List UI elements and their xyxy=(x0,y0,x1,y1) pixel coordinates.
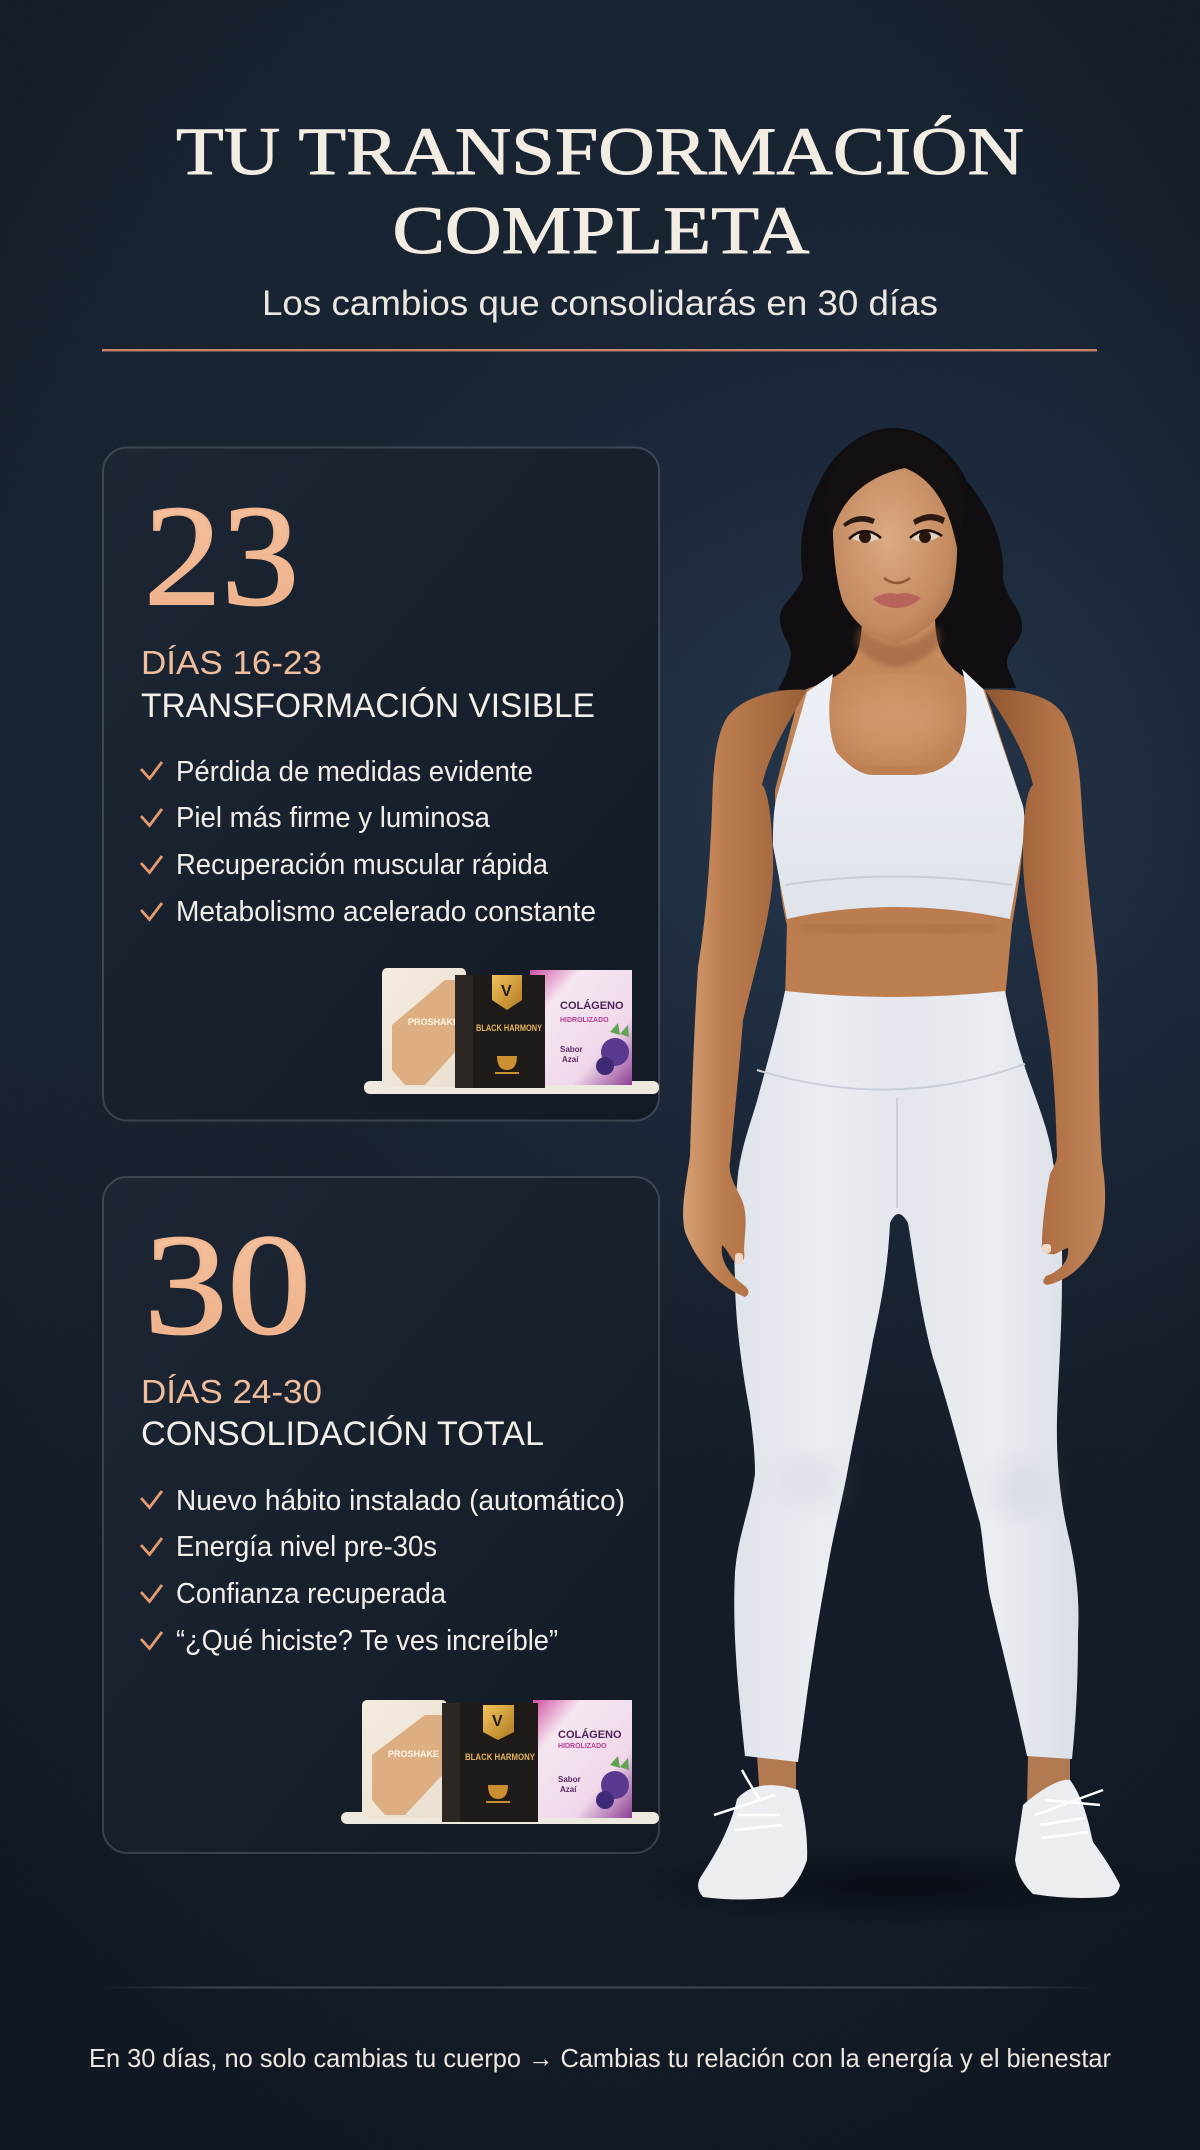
left arm and hand xyxy=(683,690,807,1297)
products shelf: Azaí xyxy=(560,1785,577,1794)
products shelf: Sabor xyxy=(560,1045,583,1054)
big number 23: 23 xyxy=(144,477,299,636)
products shelf: HIDROLIZADO xyxy=(558,1743,607,1750)
subtitle: Los cambios que consolidarás en 30 días xyxy=(262,284,938,323)
hair back xyxy=(778,428,1022,690)
products shelf: V xyxy=(501,983,512,1000)
footer divider xyxy=(102,1986,1097,1988)
title: TU TRANSFORMACIÓN xyxy=(176,113,1024,189)
checklist: Confianza recuperada xyxy=(176,1578,447,1610)
right shoe xyxy=(1015,1780,1120,1898)
neck shadow xyxy=(855,625,942,667)
phase heading: CONSOLIDACIÓN TOTAL xyxy=(141,1415,544,1453)
hair top xyxy=(824,430,967,548)
products shelf: Azaí xyxy=(562,1055,579,1064)
products shelf: PROSHAKE xyxy=(388,1749,439,1759)
chest highlight xyxy=(837,682,953,758)
panel: días 16-23 xyxy=(103,448,659,1120)
products shelf xyxy=(364,968,659,1094)
checklist: Pérdida de medidas evidente xyxy=(176,756,533,788)
checklist: Energía nivel pre-30s xyxy=(176,1531,437,1563)
products shelf: V xyxy=(492,1713,503,1730)
ankles xyxy=(757,1755,1070,1805)
leggings waistband and seam xyxy=(757,1064,1025,1208)
midriff shading xyxy=(800,925,995,1000)
products shelf: BLACK HARMONY xyxy=(476,1023,542,1033)
checklist: “¿Qué hiciste? Te ves increíble” xyxy=(176,1625,558,1657)
checklist xyxy=(141,756,596,928)
face xyxy=(833,463,957,643)
lips xyxy=(873,593,921,608)
checklist: Metabolismo acelerado constante xyxy=(176,896,596,928)
nails xyxy=(735,1244,1051,1264)
knee shading xyxy=(780,1456,1048,1518)
title: COMPLETA xyxy=(392,192,810,268)
big number 30: 30 xyxy=(144,1206,311,1365)
title xyxy=(176,113,1024,268)
eyebrows xyxy=(843,514,945,527)
leggings xyxy=(734,991,1079,1762)
torso xyxy=(775,615,1023,1000)
products shelf: Sabor xyxy=(558,1775,581,1784)
products shelf xyxy=(341,1700,659,1824)
checklist: Nuevo hábito instalado (automático) xyxy=(176,1485,625,1517)
products shelf: COLÁGENO xyxy=(560,999,624,1012)
checklist: Piel más firme y luminosa xyxy=(176,802,491,834)
checklist: Recuperación muscular rápida xyxy=(176,849,549,881)
phase heading: TRANSFORMACIÓN VISIBLE xyxy=(141,687,595,725)
left shoe xyxy=(698,1785,807,1900)
bra xyxy=(773,669,1024,919)
products shelf: COLÁGENO xyxy=(558,1728,622,1741)
products shelf: PROSHAKE xyxy=(408,1017,459,1027)
period label: DÍAS 16-23 xyxy=(141,644,322,681)
products shelf: BLACK HARMONY xyxy=(465,1752,535,1762)
products shelf: HIDROLIZADO xyxy=(560,1017,609,1024)
eyes xyxy=(849,530,942,543)
bra band line xyxy=(785,876,1012,885)
floor shadow xyxy=(620,1845,1180,1925)
nose xyxy=(884,578,910,583)
panel: días 24-30 xyxy=(103,1177,659,1853)
checklist xyxy=(141,1485,625,1657)
right arm and hand xyxy=(985,690,1105,1285)
footer statement: En 30 días, no solo cambias tu cuerpo → Cambias tu relación con la energía y el bienestar xyxy=(89,2043,1111,2073)
person figure xyxy=(620,428,1180,1925)
title divider xyxy=(102,349,1097,351)
period label: DÍAS 24-30 xyxy=(141,1373,322,1410)
